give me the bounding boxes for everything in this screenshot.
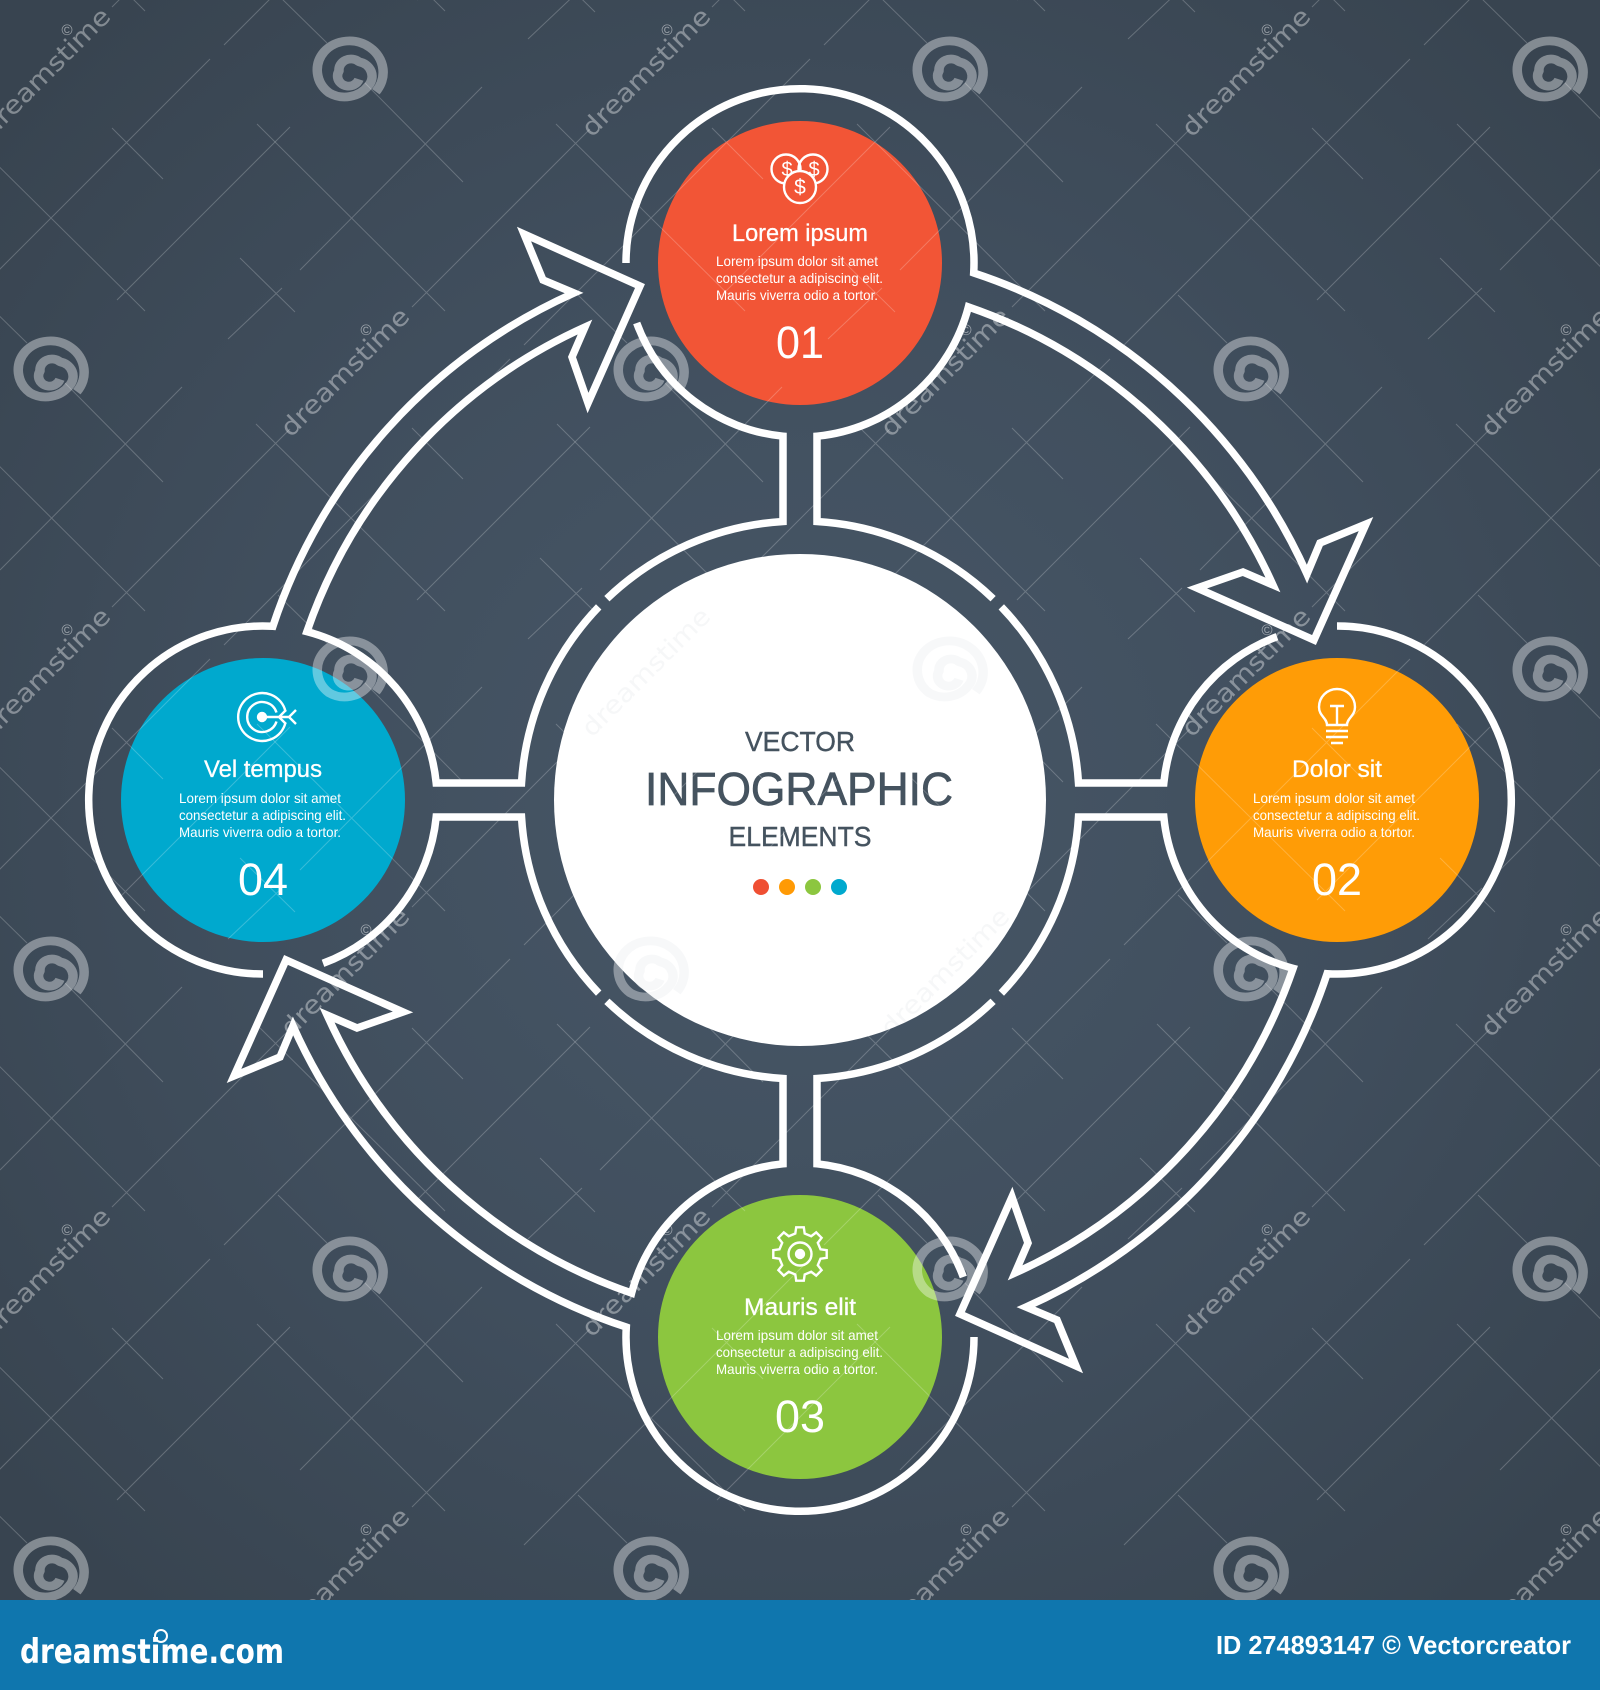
arrow: 03 to 04 xyxy=(234,960,974,1511)
watermark overlay: dreamstime xyxy=(875,302,1015,442)
number: 03 xyxy=(775,1391,825,1442)
watermark overlay: dreamstime xyxy=(1176,1202,1316,1342)
faint watermark over center circle: dreamstime xyxy=(576,602,716,742)
number: 01 xyxy=(776,317,824,368)
body text: Mauris viverra odio a tortor. xyxy=(716,1361,878,1377)
heading: Lorem ipsum xyxy=(732,220,868,247)
icon: coins xyxy=(772,154,828,203)
body text xyxy=(1253,790,1420,840)
center heading: VECTOR xyxy=(745,726,855,757)
watermark overlay: dreamstime xyxy=(1475,902,1600,1042)
icon: coins: $ xyxy=(781,159,793,181)
center heading xyxy=(645,726,953,852)
watermark overlay: © xyxy=(1261,22,1273,39)
center white circle xyxy=(554,554,1046,1046)
body text xyxy=(716,253,883,303)
body text: Lorem ipsum dolor sit amet xyxy=(716,1327,878,1343)
body text: consectetur a adipiscing elit. xyxy=(1253,807,1420,823)
watermark overlay: © xyxy=(360,322,372,339)
number: 04 xyxy=(238,854,288,905)
body text xyxy=(179,790,346,840)
icon: gear xyxy=(773,1227,827,1281)
watermark overlay: © xyxy=(1261,1222,1273,1239)
arrow: 02 to 03 xyxy=(960,626,1511,1366)
arrow: 04 to 01 xyxy=(89,234,640,974)
arrow: 01 to 02 xyxy=(626,89,1366,640)
watermark overlay: © xyxy=(1560,322,1572,339)
watermark overlay: © xyxy=(1261,622,1273,639)
watermark overlay: dreamstime xyxy=(275,902,415,1042)
icon: coins: $ xyxy=(794,176,806,199)
panel: 03 Mauris elit xyxy=(658,1195,942,1479)
watermark overlay: © xyxy=(360,1522,372,1539)
watermark overlay: dreamstime xyxy=(1475,302,1600,442)
heading: Mauris elit xyxy=(744,1294,856,1321)
watermark overlay: © xyxy=(61,1222,73,1239)
icon: coins: $ xyxy=(808,159,820,181)
watermark overlay: © xyxy=(960,1522,972,1539)
watermark overlay: © xyxy=(1560,922,1572,939)
panel: 01 Lorem ipsum xyxy=(658,121,942,405)
center heading: ELEMENTS xyxy=(728,821,872,852)
watermark overlay: © xyxy=(360,922,372,939)
watermark spiral behind center circle xyxy=(618,941,684,997)
body text xyxy=(716,1327,883,1377)
watermark overlay: dreamstime xyxy=(576,1202,716,1342)
panel: 04 Vel tempus xyxy=(121,658,405,942)
connector: left bottom xyxy=(323,817,599,993)
watermark overlay: © xyxy=(61,622,73,639)
footer credit: ID 274893147 © Vectorcreator xyxy=(1216,1630,1571,1660)
connector: right top xyxy=(1001,607,1277,783)
body text: Lorem ipsum dolor sit amet xyxy=(716,253,878,269)
body text: Mauris viverra odio a tortor. xyxy=(1253,824,1415,840)
footer logo: dreamstime.com xyxy=(20,1632,284,1672)
watermark overlay: dreamstime xyxy=(275,302,415,442)
watermark overlay: © xyxy=(661,1222,673,1239)
connector: bottom right xyxy=(817,1001,993,1277)
watermark overlay: dreamstime xyxy=(1176,2,1316,142)
watermark overlay: dreamstime xyxy=(576,2,716,142)
body text: Lorem ipsum dolor sit amet xyxy=(179,790,341,806)
heading: Vel tempus xyxy=(204,756,322,783)
footer banner xyxy=(0,1600,1600,1690)
center hub xyxy=(554,554,1046,1046)
body text: consectetur a adipiscing elit. xyxy=(716,270,883,286)
body text: Lorem ipsum dolor sit amet xyxy=(1253,790,1415,806)
icon: target xyxy=(238,693,296,741)
connector: top left xyxy=(607,323,783,599)
number: 02 xyxy=(1312,854,1362,905)
panel: 02 Dolor sit xyxy=(1195,658,1479,942)
faint watermark over center circle xyxy=(576,602,1015,1042)
body text: consectetur a adipiscing elit. xyxy=(179,807,346,823)
faint watermark over center circle: dreamstime xyxy=(875,902,1015,1042)
color dots xyxy=(753,879,847,895)
watermark overlay: © xyxy=(661,22,673,39)
watermark overlay: © xyxy=(960,322,972,339)
body text: Mauris viverra odio a tortor. xyxy=(716,287,878,303)
body text: consectetur a adipiscing elit. xyxy=(716,1344,883,1360)
watermark overlay: dreamstime xyxy=(275,1502,415,1642)
watermark overlay: dreamstime xyxy=(875,1502,1015,1642)
watermark overlay: © xyxy=(61,22,73,39)
watermark overlay: dreamstime xyxy=(1475,1502,1600,1642)
watermark overlay: © xyxy=(1560,1522,1572,1539)
body text: Mauris viverra odio a tortor. xyxy=(179,824,341,840)
center heading: INFOGRAPHIC xyxy=(645,763,953,815)
heading: Dolor sit xyxy=(1292,756,1382,783)
icon: light bulb xyxy=(1319,689,1355,743)
watermark overlay: dreamstime xyxy=(1176,602,1316,742)
